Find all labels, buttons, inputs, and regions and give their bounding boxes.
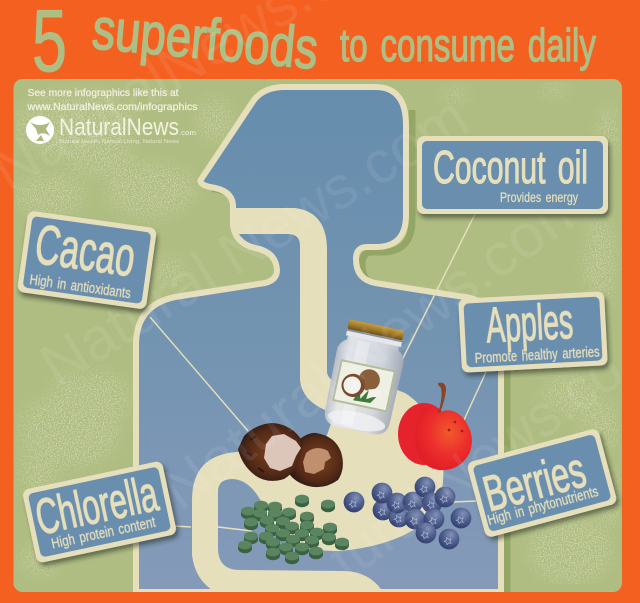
label: Chlorella: High protein content	[50, 514, 158, 552]
label: Berries: High in phytonutrients	[486, 483, 600, 529]
body silhouette	[136, 87, 501, 592]
label: Chlorella: Chlorella	[31, 465, 163, 546]
label: Coconut oil	[417, 136, 608, 214]
label: Apples: Promote healthy arteries	[474, 345, 600, 367]
label: Berries: Berries	[477, 442, 591, 522]
connector lines	[150, 212, 486, 531]
logo: NaturalNews: NaturalNews	[59, 114, 179, 141]
see more text: www.NaturalNews.com/infographics	[26, 101, 197, 113]
logo: NaturalNews: .com	[179, 130, 196, 137]
chlorella tablets	[238, 495, 349, 564]
see more text: See more infographics like this at	[28, 87, 179, 99]
watermark: tural News.co	[316, 336, 635, 593]
berries	[344, 477, 471, 549]
label: Chlorella	[22, 460, 177, 564]
logo: NaturalNews: Natural Health, Natural Living, Natural News	[60, 139, 179, 145]
see more text	[26, 87, 197, 113]
coconut oil jar	[321, 318, 410, 437]
watermark: Natural News.com	[28, 83, 479, 399]
label: Apples: Apples	[485, 293, 574, 353]
watermark: Natural News.com	[148, 169, 600, 523]
title	[32, 0, 596, 90]
label: Cacao: High in antioxidants	[29, 271, 132, 302]
cacao pods	[238, 423, 343, 487]
label: Cacao	[17, 210, 157, 310]
jar label	[333, 360, 395, 411]
label: Apples	[458, 291, 608, 373]
apple	[398, 383, 472, 470]
body shadow	[212, 110, 507, 592]
esophagus and stomach	[192, 208, 443, 592]
label: Cacao: Cacao	[31, 212, 139, 288]
label: Coconut oil: Provides energy	[500, 189, 578, 205]
